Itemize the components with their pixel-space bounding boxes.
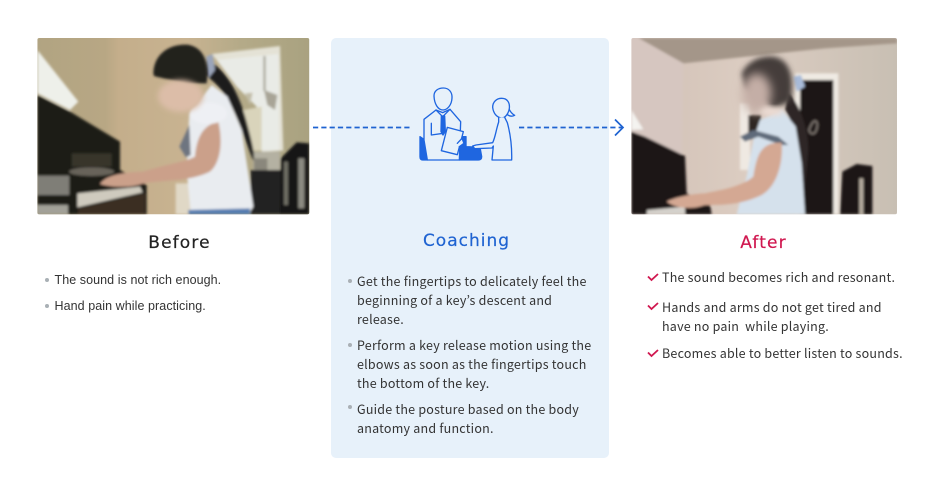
list: coaching items: the bottom of the key. — [357, 373, 489, 392]
list: after items: The sound becomes rich and resonant. — [662, 267, 895, 286]
list: coaching items: Get the fingertips to delicately feel the — [357, 271, 587, 290]
heading: coaching: Coaching — [423, 231, 510, 251]
list: before items: Hand pain while practicing. — [54, 299, 206, 313]
panel: coaching background — [331, 38, 609, 458]
photo: after, girl upright at piano — [631, 38, 897, 214]
list: before items — [45, 273, 221, 313]
icon: check — [647, 349, 659, 358]
arrow: coaching to after — [519, 118, 624, 136]
list: after items — [647, 267, 903, 362]
list: coaching items: elbows as soon as the fingertips touch — [357, 354, 587, 373]
list: coaching items: anatomy and function. — [357, 418, 494, 437]
icon: check — [647, 302, 659, 310]
list: after items: Hands and arms do not get tired and — [662, 297, 882, 316]
heading: before: Before — [148, 233, 211, 253]
list: coaching items: Guide the posture based on the body — [357, 399, 579, 418]
list: coaching items: beginning of a key’s descent and — [357, 290, 552, 309]
list: coaching items: Perform a key release motion using the — [357, 335, 591, 354]
list: after items: Becomes able to better listen to sounds. — [662, 343, 903, 362]
list: coaching items: release. — [357, 309, 404, 328]
icon: teacher and student — [419, 87, 516, 161]
arrow: before to coaching — [313, 126, 410, 128]
photo: before, girl leaning over piano — [37, 38, 310, 214]
icon: check — [647, 273, 659, 282]
heading: after: After — [740, 233, 787, 253]
list: coaching items — [348, 271, 591, 437]
list: after items: have no pain while playing. — [662, 316, 829, 335]
list: before items: The sound is not rich enough. — [54, 273, 221, 287]
